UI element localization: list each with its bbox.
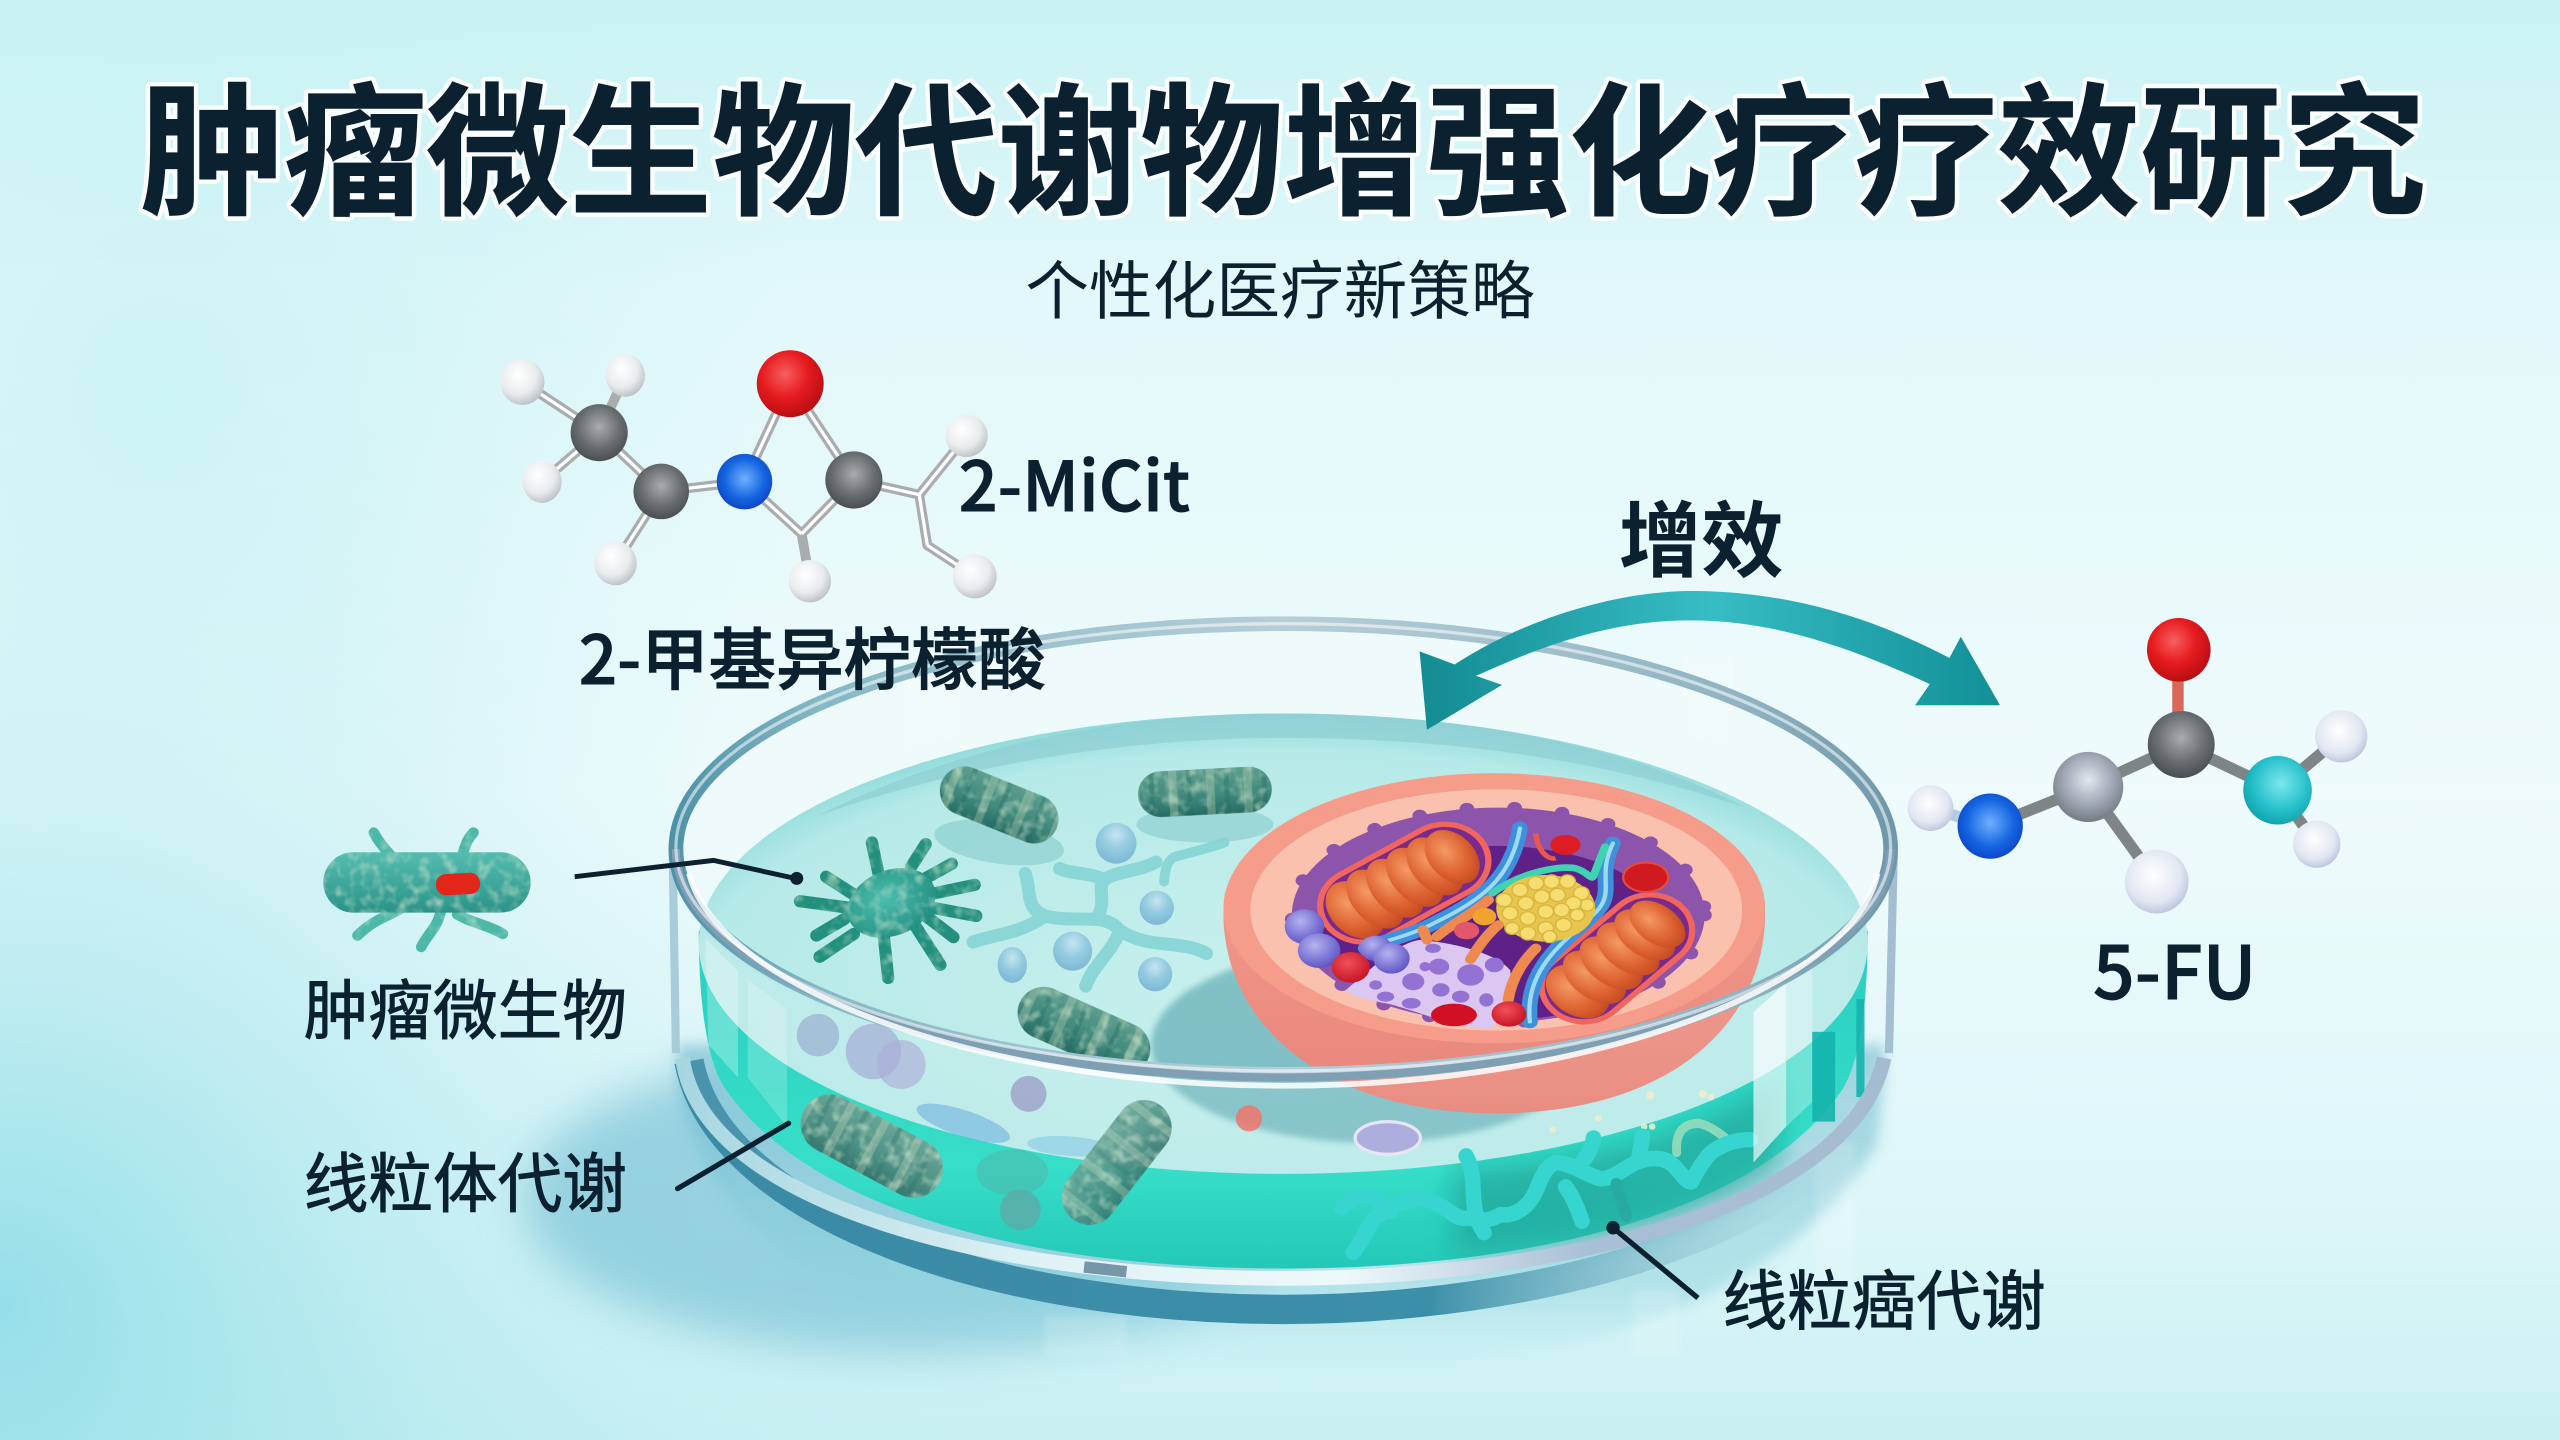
organelles [1285,833,1668,1027]
mitochondrion right [1524,880,1710,1037]
label: 线粒癌代谢: 线粒癌代谢 [1722,1249,2046,1343]
title: 肿瘤微生物代谢物增强化疗疗效研究 [141,38,2426,245]
mitochondrion capsule D [790,1084,953,1208]
molecule: 5-FU [1908,618,2367,913]
membranes [1366,828,1613,1022]
cell body [1223,913,1765,1113]
leader line: cancer metabolism [1609,1224,1698,1298]
shadow under cell [1151,947,1592,1143]
molecule: 2-MiCit [500,350,997,602]
front glass wall [672,865,1895,1287]
subtitle: 个性化医疗新策略 [1025,240,1535,332]
tumor cell cross-section [1223,773,1765,1113]
arrow: double-headed synergy arc [1420,591,2000,730]
dish shadow and reflection on surface [522,1045,1886,1375]
mitochondrion capsule B [1137,766,1273,818]
liquid body [699,931,1868,1269]
panel: petri dish [672,622,1895,1287]
liquid surface [699,713,1868,1174]
mitochondrion capsule C [1009,978,1159,1083]
mitochondrion capsule A [932,759,1066,851]
label: 2-甲基异柠檬酸: 2-甲基异柠檬酸 [579,607,1046,704]
label: 5-FU: 5-FU [2093,915,2256,1021]
icon: tumor microbe [323,833,531,947]
dish glass interior [673,622,1894,1076]
glass highlights [705,640,1812,1162]
pale branching filaments [973,842,1224,986]
cytoplasm [1292,808,1705,1022]
label: 2-MiCit: 2-MiCit [959,431,1190,531]
nucleus cluster [1496,875,1595,943]
lipid network [1346,940,1511,1029]
submerged items [797,1014,1714,1230]
mitochondrion left [1303,810,1505,956]
label: 增效: 增效 [1619,474,1784,594]
mitochondrion capsule E [1051,1089,1183,1236]
dish rim [676,624,1891,1086]
label: 线粒体代谢: 线粒体代谢 [304,1132,627,1226]
label: 肿瘤微生物: 肿瘤微生物 [304,958,627,1052]
bubbles on surface [998,823,1174,991]
cell top ring [1223,773,1765,1043]
title: 肿瘤微生物代谢物增强化疗疗效研究 [141,38,2426,245]
teal filaments at dish bottom [1342,1123,1750,1252]
star-shaped microbe in dish [800,842,976,978]
capsule shadows [932,807,1273,873]
dark teal zone behind filaments [1453,1078,1780,1254]
surface back band [816,713,1747,816]
right wall teal reflections [1812,999,1864,1122]
leader line: mitochondrial metabolism [678,1123,789,1189]
dish base edge [673,849,1894,1278]
leader line: tumor microbe [575,860,801,882]
